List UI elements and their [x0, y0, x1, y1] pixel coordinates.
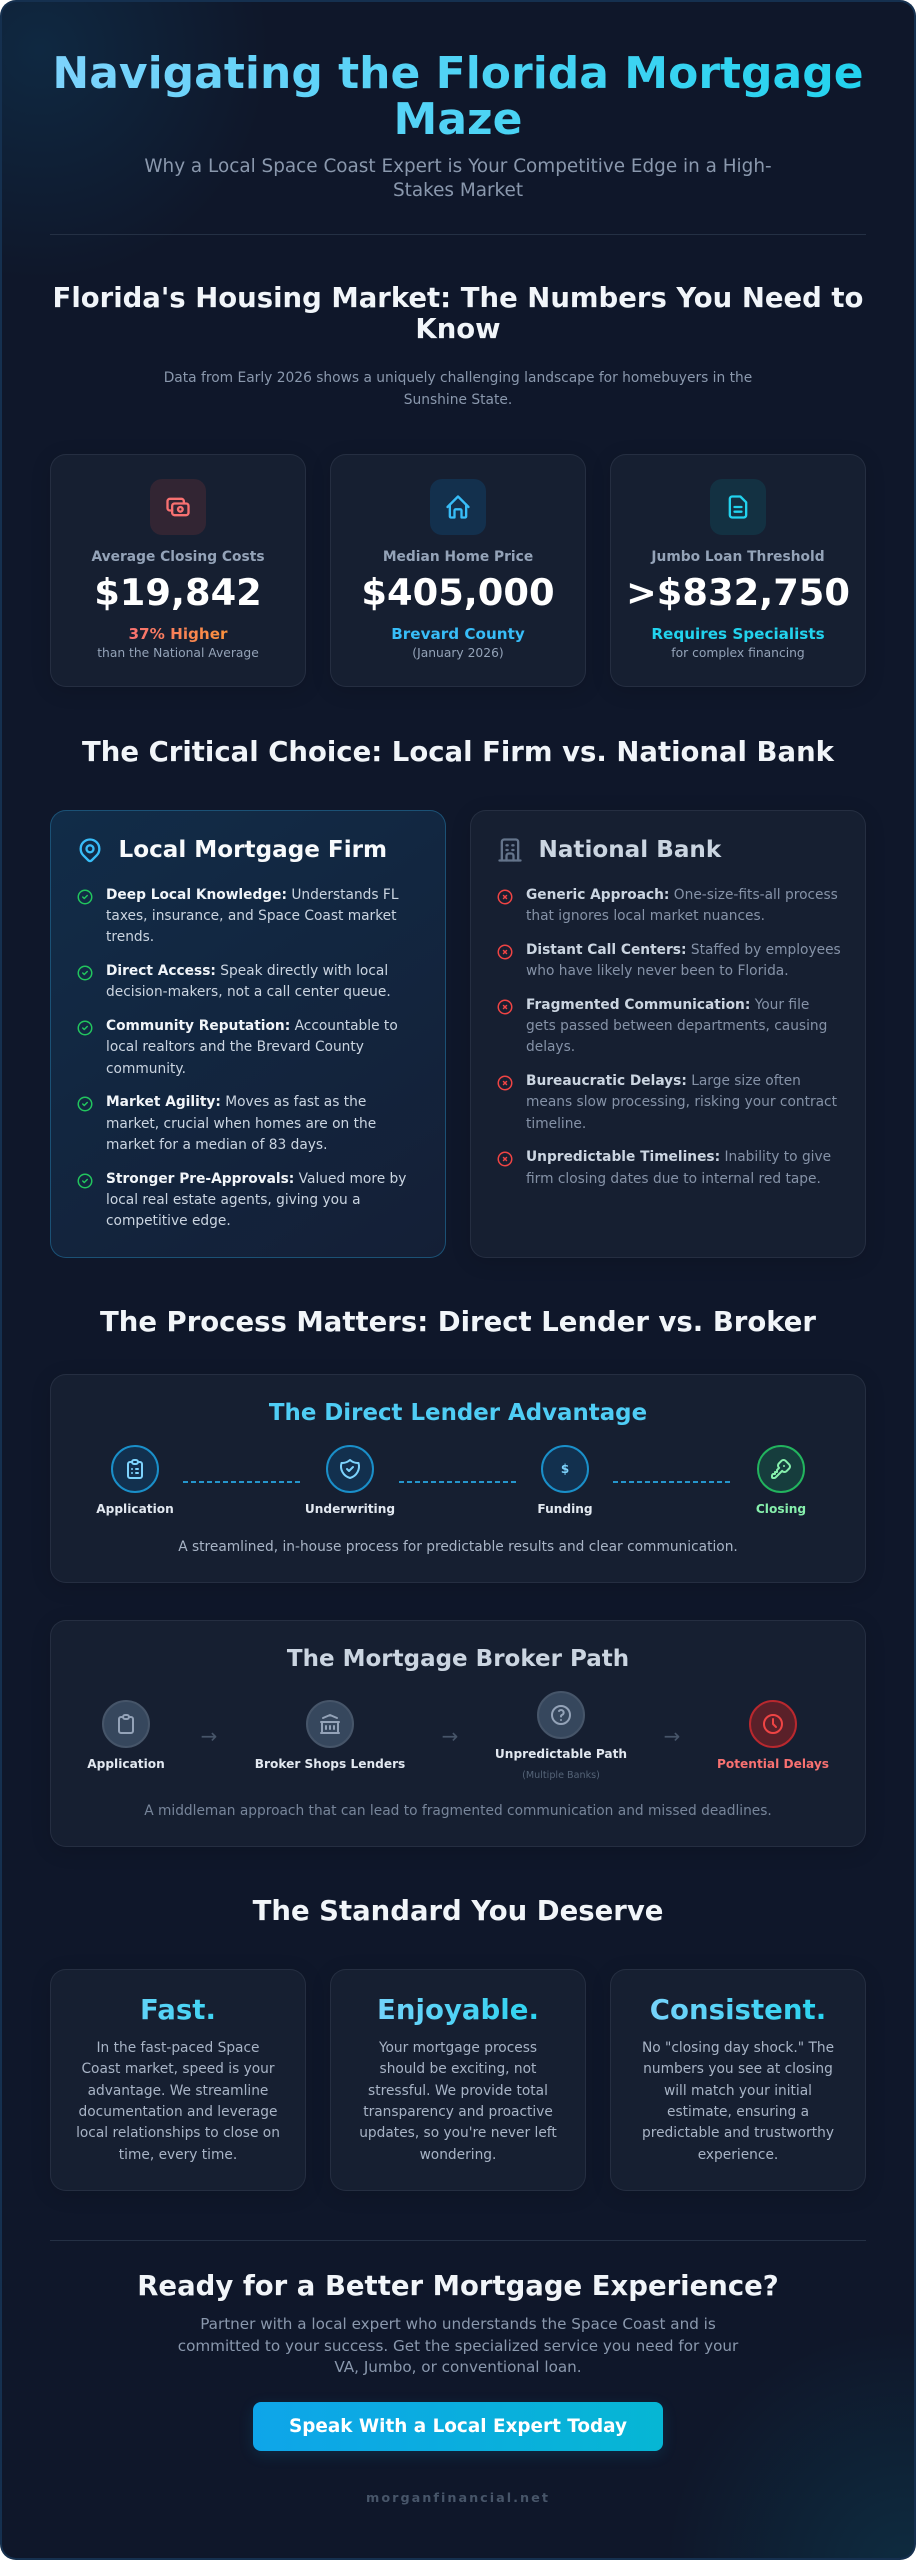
card text: Coast market, speed is your — [81, 2061, 275, 2077]
panel title: The Mortgage Broker Path — [287, 1646, 629, 1672]
card text: will match your initial — [664, 2083, 812, 2099]
heading: process matters: The Process Matters: Direct Lender vs. Broker — [100, 1306, 816, 1338]
step: unpredictable path: Unpredictable Path — [495, 1747, 627, 1761]
item: fragmented communication — [498, 997, 827, 1055]
card text: advantage. We streamline — [88, 2083, 268, 2099]
item: deep local knowledge: Deep Local Knowledge: Understands FL — [106, 887, 399, 903]
label: Jumbo Loan Threshold — [651, 549, 825, 565]
arrow: → — [201, 1724, 217, 1748]
card text: wondering. — [420, 2147, 496, 2163]
stat card: closing costs — [50, 454, 306, 687]
stat card: home price — [330, 454, 586, 687]
card text: local relationships to close on — [76, 2125, 280, 2141]
card text: In the fast-paced Space — [96, 2040, 260, 2056]
note: for complex financing — [671, 646, 805, 660]
item: stronger pre-approvals — [78, 1171, 406, 1229]
call to action heading: Ready for a Better Mortgage Experience? — [137, 2270, 779, 2302]
heading: critical choice: The Critical Choice: Local Firm vs. National Bank — [82, 736, 834, 768]
step: broker shops lenders: Broker Shops Lenders — [255, 1757, 405, 1771]
item: deep local knowledge: taxes, insurance, and Space Coast market — [106, 908, 397, 924]
item: community reputation — [78, 1018, 398, 1077]
item: bureaucratic delays — [498, 1073, 837, 1132]
title: Maze — [394, 94, 522, 145]
step: application: Application — [87, 1757, 165, 1771]
card text — [359, 2040, 557, 2163]
item: market agility: market for a median of 83 days. — [106, 1137, 327, 1153]
icon: house — [430, 479, 486, 535]
step: closing — [756, 1445, 806, 1516]
intro text — [164, 370, 752, 408]
card text: Your mortgage process — [379, 2040, 537, 2056]
item: generic approach: that ignores local market nuances. — [526, 908, 765, 924]
icon: map pin — [80, 838, 100, 862]
subtitle: Stakes Market — [393, 180, 523, 201]
card text: documentation and leverage — [79, 2104, 277, 2120]
card text: transparency and proactive — [363, 2104, 553, 2120]
arrow: → — [664, 1724, 680, 1748]
arrow: → — [442, 1724, 458, 1748]
item: community reputation: community. — [106, 1061, 186, 1077]
icon: cash — [150, 479, 206, 535]
item: direct access: Direct Access: Speak directly with local — [106, 963, 388, 979]
item: market agility: market, crucial when homes are on the — [106, 1116, 376, 1132]
item: bureaucratic delays: timeline. — [526, 1116, 586, 1132]
label: Average Closing Costs — [91, 549, 265, 565]
card text: numbers you see at closing — [643, 2061, 833, 2077]
item: community reputation: local realtors and the Brevard County — [106, 1039, 364, 1055]
call to action text: committed to your success. Get the specialized service you need for your — [178, 2337, 738, 2355]
intro text: Data from Early 2026 shows a uniquely challenging landscape for homebuyers in the — [164, 370, 752, 386]
card: consistent — [610, 1969, 866, 2191]
heading: the standard: The Standard You Deserve — [253, 1895, 663, 1927]
step: potential delays: Potential Delays — [717, 1757, 829, 1771]
title — [50, 51, 866, 143]
step: application: Application — [96, 1502, 174, 1516]
item: generic approach: Generic Approach: One-size-fits-all process — [526, 887, 838, 903]
button: Speak With a Local Expert Today — [289, 2416, 627, 2437]
card text: updates, so you're never left — [359, 2125, 557, 2141]
card text: stressful. We provide total — [368, 2083, 548, 2099]
panel: local mortgage firm — [50, 810, 446, 1258]
highlight: Requires Specialists — [651, 624, 825, 642]
heading: housing market — [53, 282, 863, 345]
caption: A middleman approach that can lead to fragmented communication and missed deadlines. — [144, 1803, 772, 1819]
card text — [76, 2040, 280, 2163]
heading: housing market: Florida's Housing Market: The Numbers You Need to — [53, 282, 863, 314]
note: than the National Average — [97, 646, 259, 660]
panel title: National Bank — [538, 837, 721, 863]
step: unpredictable path — [495, 1691, 627, 1781]
step: broker shops lenders — [255, 1700, 405, 1771]
card title: Fast. — [140, 1993, 216, 2026]
stat card: jumbo threshold — [610, 454, 866, 687]
subtitle: Why a Local Space Coast Expert is Your Competitive Edge in a High- — [144, 156, 772, 177]
card text: time, every time. — [119, 2147, 237, 2163]
item: market agility: Market Agility: Moves as fast as the — [106, 1094, 366, 1110]
call to action text — [178, 2315, 738, 2376]
card text — [642, 2040, 834, 2163]
item: deep local knowledge — [78, 887, 399, 945]
step: application — [87, 1700, 165, 1771]
call to action text: VA, Jumbo, or conventional loan. — [334, 2358, 582, 2376]
step: funding — [537, 1445, 593, 1516]
button — [253, 2402, 663, 2451]
card text: No "closing day shock." The — [642, 2040, 834, 2056]
highlight: 37% Higher — [128, 624, 228, 642]
title: Navigating the Florida Mortgage — [52, 48, 864, 99]
step: underwriting: Underwriting — [305, 1502, 395, 1516]
caption: A streamlined, in-house process for predictable results and clear communication. — [178, 1539, 738, 1555]
card text: predictable and trustworthy — [642, 2125, 834, 2141]
item: unpredictable timelines: firm closing dates due to internal red tape. — [526, 1171, 821, 1187]
item: market agility — [78, 1094, 376, 1153]
step: funding: $ — [561, 1462, 569, 1476]
value: $19,842 — [94, 571, 262, 614]
step: application — [96, 1445, 174, 1516]
card: enjoyable — [330, 1969, 586, 2191]
subtitle — [144, 156, 772, 201]
card: fast — [50, 1969, 306, 2191]
item: distant call centers — [498, 942, 841, 979]
card title — [75, 1994, 281, 2026]
note: (January 2026) — [412, 646, 504, 660]
panel: direct lender — [50, 1374, 866, 1583]
intro text: Sunshine State. — [404, 392, 512, 408]
step: potential delays — [717, 1700, 829, 1771]
card title: Enjoyable. — [377, 1993, 539, 2026]
step: underwriting — [305, 1445, 395, 1516]
highlight: Brevard County — [391, 624, 525, 642]
item: direct access — [78, 963, 391, 1000]
item: unpredictable timelines: Unpredictable Timelines: Inability to give — [526, 1149, 831, 1165]
step: closing: Closing — [756, 1502, 806, 1516]
panel title: The Direct Lender Advantage — [269, 1400, 647, 1426]
item: deep local knowledge: trends. — [106, 929, 154, 945]
item: fragmented communication: delays. — [526, 1039, 575, 1055]
icon: document — [710, 479, 766, 535]
step: funding: Funding — [537, 1502, 593, 1516]
value: $405,000 — [361, 571, 555, 614]
call to action text: Partner with a local expert who understands the Space Coast and is — [200, 2315, 716, 2333]
label: Median Home Price — [383, 549, 533, 565]
item: unpredictable timelines — [498, 1149, 831, 1187]
heading: housing market: Know — [415, 313, 501, 345]
item: generic approach — [498, 887, 838, 924]
item: stronger pre-approvals: competitive edge. — [106, 1213, 231, 1229]
card text: experience. — [698, 2147, 778, 2163]
card text: should be exciting, not — [380, 2061, 536, 2077]
step: unpredictable path: (Multiple Banks) — [522, 1770, 600, 1781]
item: bureaucratic delays: Bureaucratic Delays: Large size often — [526, 1073, 801, 1089]
item: stronger pre-approvals: local real estate agents, giving you a — [106, 1192, 361, 1208]
item: direct access: decision-makers, not a call center queue. — [106, 984, 391, 1000]
item: fragmented communication: Fragmented Communication: Your file — [526, 997, 809, 1013]
item: community reputation: Community Reputation: Accountable to — [106, 1018, 398, 1034]
card title: Consistent. — [650, 1993, 826, 2026]
icon: building — [498, 838, 522, 862]
item: fragmented communication: gets passed between departments, causing — [526, 1018, 827, 1034]
panel title: Local Mortgage Firm — [118, 837, 387, 863]
panel: mortgage broker — [50, 1620, 866, 1847]
value: >$832,750 — [626, 571, 850, 614]
card text: estimate, ensuring a — [667, 2104, 809, 2120]
footer website: morganfinancial.net — [366, 2491, 550, 2506]
panel: national bank — [470, 810, 866, 1258]
item: stronger pre-approvals: Stronger Pre-Approvals: Valued more by — [106, 1171, 406, 1187]
item: bureaucratic delays: means slow processing, risking your contract — [526, 1094, 837, 1110]
item: distant call centers: who have likely never been to Florida. — [526, 963, 789, 979]
item: distant call centers: Distant Call Centers: Staffed by employees — [526, 942, 841, 958]
